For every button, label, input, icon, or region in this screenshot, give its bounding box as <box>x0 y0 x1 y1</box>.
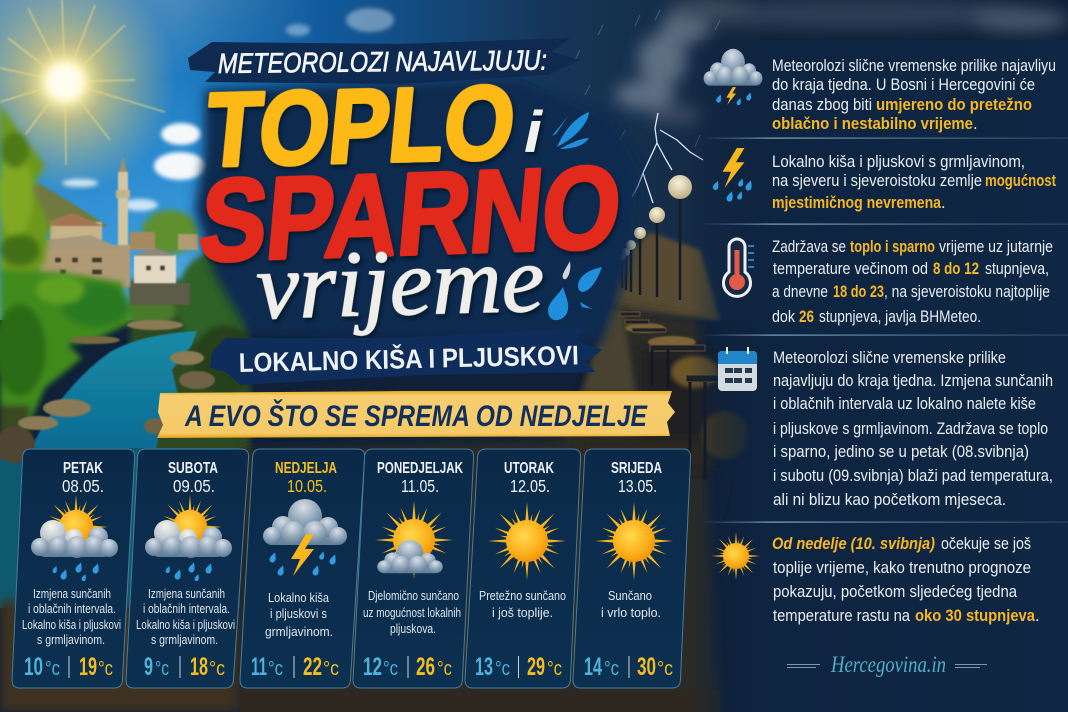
text block: rest of week: i sparno, jedino se u petak (08.svibnja) <box>773 443 1029 461</box>
text block: cloudy today: oblačno i nestabilno vrijeme <box>772 115 973 133</box>
forecast card: subota: 09.05. <box>173 476 215 496</box>
forecast card: nedjelja: 22 <box>303 653 322 681</box>
rain streaks <box>575 10 720 180</box>
text block: temperatures <box>772 238 1053 326</box>
subtitle: meteorolozi najavljuju: METEOROLOZI NAJAVLJUJU: <box>218 45 547 79</box>
forecast card: petak: i oblačnih intervala. <box>28 601 116 616</box>
forecast card: utorak: 12.05. <box>510 476 550 496</box>
forecast card: nedjelja: Lokalno kiša <box>268 590 330 605</box>
icon: sun with small cloud <box>375 501 453 579</box>
headline: toplo i sparno vrijeme: i <box>524 100 544 165</box>
forecast card: nedjelja: 11 <box>251 653 267 681</box>
text block: temperatures: Zadržava se <box>772 238 846 256</box>
text block: from sunday <box>772 535 1040 625</box>
forecast card: nedjelja: °c <box>323 658 339 680</box>
text block: showers and storms: na sjeveru i sjeveroistoku zemlje <box>772 172 982 190</box>
text block: from sunday: očekuje se još <box>941 535 1031 553</box>
forecast card: utorak: i još toplije. <box>492 605 553 620</box>
forecast card: nedjelja: NEDJELJA <box>275 460 337 477</box>
text block: temperatures: toplo i sparno <box>850 238 935 256</box>
text block: cloudy today: . <box>973 115 978 133</box>
icon: lightning with drops <box>712 148 754 202</box>
text block: rest of week: ali ni blizu kao početkom mjeseca. <box>773 491 1006 509</box>
forecast card: subota <box>126 449 249 688</box>
icon: sun behind cloud with rain <box>145 495 232 582</box>
headline: toplo i sparno vrijeme: vrijeme <box>255 227 545 339</box>
forecast card: srijeda: Sunčano <box>608 588 652 603</box>
footer brand: Hercegovina.in <box>830 652 946 677</box>
river <box>30 331 197 452</box>
text block: showers and storms <box>772 153 1056 212</box>
icon: water drops <box>548 261 602 320</box>
forecast card: petak: Lokalno kiša i pljuskovi <box>22 617 121 632</box>
forecast card: petak: 19 <box>79 653 97 681</box>
forecast card: nedjelja <box>240 449 365 688</box>
forecast card: srijeda: SRIJEDA <box>611 460 662 477</box>
text block: temperatures: 8 do 12 <box>933 260 979 278</box>
forecast card: petak: PETAK <box>63 460 103 477</box>
forecast card: subota: i oblačnih intervala. <box>143 601 230 616</box>
promenade pavement <box>240 305 720 712</box>
text block: rest of week <box>773 349 1053 509</box>
forecast card: ponedjeljak: 26 <box>416 653 435 681</box>
forecast card: srijeda: °c <box>604 658 619 680</box>
text block: temperatures: 18 do 23 <box>833 283 884 301</box>
forecast card: nedjelja: 10.05. <box>287 476 327 496</box>
icon: rain cloud <box>704 49 762 106</box>
forecast card: petak: °c <box>98 658 113 680</box>
white clouds <box>62 8 394 211</box>
strip: lokalno kisa i pljuskovi: LOKALNO KIŠA I PLJUSKOVI <box>238 339 579 378</box>
cafe tables and chairs <box>620 312 749 520</box>
icon: sun behind cloud with rain <box>31 495 118 582</box>
forecast card: ponedjeljak <box>353 449 474 688</box>
right bank greenery <box>124 210 257 455</box>
forecast card: subota: 9 <box>144 653 153 681</box>
text block: cloudy today <box>772 57 1056 133</box>
forecast card: subota: Izmjena sunčanih <box>148 586 225 601</box>
forecast card: utorak <box>465 449 581 688</box>
promenade building <box>612 232 720 320</box>
text block: cloudy today: danas zbog biti <box>772 96 872 114</box>
forecast card: utorak: UTORAK <box>504 460 554 477</box>
forecast card: ponedjeljak: °c <box>437 658 452 680</box>
forecast card: petak: 10 <box>24 653 43 681</box>
text block: showers and storms: Lokalno kiša i pljuskovi s grmljavinom, <box>772 153 1025 171</box>
text block: rest of week: Meteorolozi slične vremenske prilike <box>773 349 1006 367</box>
forecast card: petak: Izmjena sunčanih <box>33 586 111 601</box>
text block: showers and storms: . <box>941 194 946 212</box>
forecast card: petak: °c <box>45 658 60 680</box>
text block: cloudy today: umjereno do pretežno <box>876 96 1032 114</box>
forecast card: subota: Lokalno kiša i pljuskovi <box>136 617 235 632</box>
hill <box>15 182 108 230</box>
icon: storm cloud with lightning <box>263 499 347 576</box>
text block: showers and storms: mjestimičnog nevremena <box>772 194 942 212</box>
text block: from sunday: . <box>1035 607 1040 625</box>
text block: from sunday: Od nedelje (10. svibnja) <box>772 535 935 553</box>
forecast card: ponedjeljak: PONEDJELJAK <box>377 460 463 477</box>
forecast card: subota: °c <box>209 658 225 680</box>
text block: from sunday: pokazuju, početkom sljedećeg tjedna <box>773 583 1018 601</box>
text block: temperatures: stupnjeva, <box>985 260 1049 278</box>
text block: cloudy today: do kraja tjedna. U Bosni i Hercegovini će <box>772 76 1035 94</box>
forecast card: srijeda: 14 <box>584 653 602 681</box>
forecast card: srijeda: °c <box>657 658 673 680</box>
river rocks <box>0 320 215 463</box>
forecast card: ponedjeljak: uz mogućnost lokalnih <box>363 605 461 620</box>
title backdrop <box>188 38 640 345</box>
town and minaret <box>38 156 198 305</box>
forecast card: subota: SUBOTA <box>168 460 218 477</box>
forecast card: utorak: °c <box>547 658 562 680</box>
panel: right column <box>690 40 1068 712</box>
forecast card: nedjelja: grmljavinom. <box>265 624 333 639</box>
forecast card: subota: 18 <box>190 653 208 681</box>
lightning <box>632 113 703 203</box>
text block: from sunday: toplije vrijeme, kako trenutno prognoze <box>773 559 1031 577</box>
forecast card: srijeda <box>573 449 691 688</box>
icon: calendar <box>718 347 757 391</box>
forecast card: nedjelja: i pljuskovi s <box>270 606 327 621</box>
forecast card: ponedjeljak: Djelomično sunčano <box>368 588 459 603</box>
forecast card: ponedjeljak: 11.05. <box>401 476 439 496</box>
icon: water splash top <box>552 112 589 149</box>
forecast card: utorak: °c <box>495 658 510 680</box>
strip: lokalno kisa i pljuskovi <box>210 328 602 385</box>
icon: thermometer <box>723 239 754 296</box>
text block: rest of week: i oblačnih intervala uz lokalno nalete kiše <box>773 395 1036 413</box>
street lamps <box>618 175 692 300</box>
text block: from sunday: oko 30 stupnjeva <box>915 607 1036 625</box>
text block: temperatures: temperature večinom od <box>773 260 928 278</box>
text block: from sunday: temperature rastu na <box>773 607 911 625</box>
forecast card: srijeda: 13.05. <box>618 476 657 496</box>
icon: sun <box>488 502 566 580</box>
forecast card: subota: °c <box>155 658 169 680</box>
banner: a evo sto se sprema od nedjelje: A EVO ŠTO SE SPREMA OD NEDJELJE <box>184 399 648 433</box>
forecast card: ponedjeljak: 12 <box>363 653 382 681</box>
trees and bushes <box>0 105 132 450</box>
forecast card: ponedjeljak: pljuskova. <box>390 621 436 636</box>
text block: temperatures: a dnevne <box>772 283 828 301</box>
forecast card: utorak: Pretežno sunčano <box>479 588 566 603</box>
icon: sun <box>595 502 673 580</box>
storm clouds <box>615 0 1068 123</box>
forecast card: nedjelja: °c <box>268 658 283 680</box>
forecast card: subota: s grmljavinom. <box>151 632 218 647</box>
icon: small sun <box>712 532 760 580</box>
headline: toplo i sparno vrijeme <box>195 64 626 339</box>
text block: temperatures: dok <box>772 308 796 326</box>
forecast card: srijeda: 30 <box>637 653 656 681</box>
banner: a evo sto se sprema od nedjelje <box>157 391 675 438</box>
forecast card: srijeda: i vrlo toplo. <box>601 605 661 620</box>
forecast card: ponedjeljak: °c <box>383 658 398 680</box>
headline: toplo i sparno vrijeme: TOPLO <box>201 64 520 189</box>
text block: temperatures: 26 <box>799 308 814 326</box>
forecast card: petak <box>12 449 135 688</box>
forecast card: petak: 08.05. <box>62 476 104 496</box>
sun glow <box>0 0 177 194</box>
forecast card: petak: s grmljavinom. <box>37 632 105 647</box>
forecast card: utorak: 13 <box>475 653 493 681</box>
text block: temperatures: stupnjeva, javlja BHMeteo. <box>819 308 981 326</box>
headline: toplo i sparno vrijeme: SPARNO <box>195 142 626 286</box>
forecast card: utorak: 29 <box>527 653 545 681</box>
